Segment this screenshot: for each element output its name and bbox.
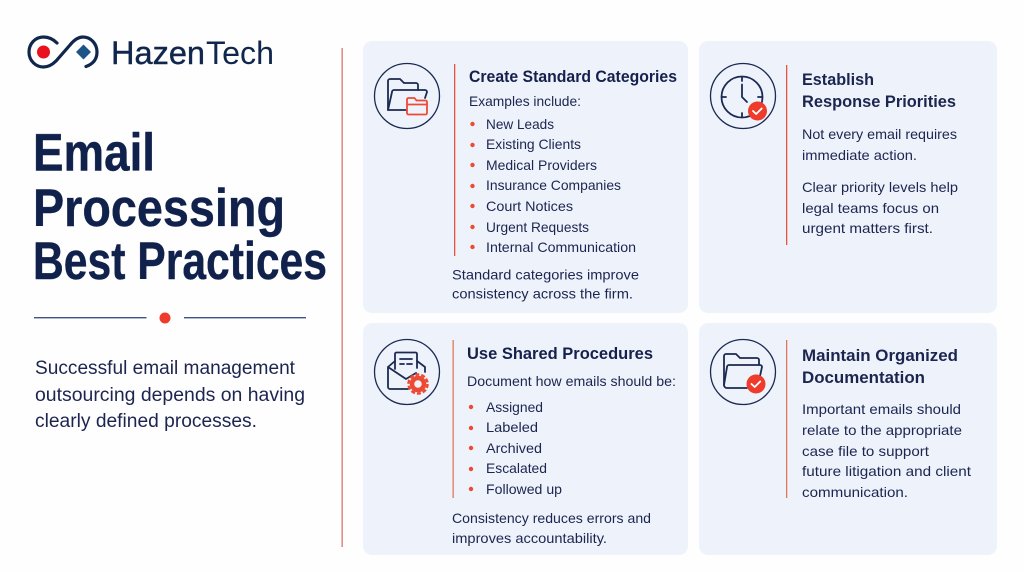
- intro text: outsourcing depends on having: [35, 385, 305, 406]
- body text: Important emails should: [802, 401, 961, 417]
- body text: relate to the appropriate: [802, 422, 962, 438]
- closing text: consistency across the firm.: [452, 286, 633, 302]
- bullet list: Existing Clients: [486, 136, 581, 152]
- closing text: Standard categories improve: [452, 266, 639, 282]
- icon: folder with check: [710, 340, 776, 404]
- heading: Establish: [802, 71, 874, 89]
- title: Email: [33, 124, 155, 182]
- body text: immediate action.: [802, 147, 917, 163]
- heading: Use Shared Procedures: [467, 345, 653, 363]
- heading: Documentation: [802, 369, 925, 387]
- logo wordmark: Tech: [206, 35, 274, 71]
- title divider: [34, 312, 306, 324]
- bullet list: New Leads: [486, 116, 554, 132]
- body text: case file to support: [802, 443, 929, 459]
- closing text: improves accountability.: [452, 530, 607, 546]
- body text: future litigation and client: [802, 463, 971, 479]
- body text: Not every email requires: [802, 126, 957, 142]
- bullet list: Court Notices: [486, 198, 573, 214]
- body text: communication.: [802, 484, 908, 500]
- body text: legal teams focus on: [802, 200, 939, 216]
- closing text: [452, 266, 639, 302]
- bullet list: Insurance Companies: [486, 177, 621, 193]
- body text: urgent matters first.: [802, 220, 933, 236]
- bullet list: Followed up: [486, 481, 562, 497]
- panel: create standard categories: [363, 41, 688, 313]
- logo wordmark: Hazen: [111, 35, 205, 71]
- panel: maintain organized documentation: [699, 323, 997, 555]
- bullet list: Medical Providers: [486, 157, 597, 173]
- heading: Maintain Organized: [802, 347, 958, 365]
- intro line: Examples include:: [469, 93, 581, 109]
- intro text: [35, 358, 305, 432]
- icon: folders: [374, 64, 440, 128]
- heading: Response Priorities: [802, 93, 956, 111]
- body text: [802, 126, 958, 236]
- title: [33, 124, 327, 291]
- icon: envelope with gear: [374, 340, 440, 404]
- icon: logo mark: [29, 37, 97, 67]
- title: Best Practices: [33, 232, 327, 291]
- panel: establish response priorities: [699, 41, 997, 313]
- logo wordmark: [111, 35, 274, 71]
- bullet list: [470, 116, 636, 255]
- heading: [802, 71, 956, 111]
- bullet list: [469, 399, 562, 497]
- intro line: Document how emails should be:: [467, 373, 676, 389]
- intro text: Successful email management: [35, 358, 296, 379]
- bullet list: Urgent Requests: [486, 219, 589, 235]
- bullet list: Assigned: [486, 399, 543, 415]
- heading: [802, 347, 958, 387]
- heading: Create Standard Categories: [469, 68, 677, 86]
- bullet list: Escalated: [486, 460, 547, 476]
- closing text: Consistency reduces errors and: [452, 510, 651, 526]
- title: Processing: [33, 179, 285, 238]
- body text: [802, 401, 971, 500]
- bullet list: Internal Communication: [486, 239, 636, 255]
- panel: use shared procedures: [363, 323, 688, 555]
- bullet list: Archived: [486, 440, 542, 456]
- intro text: clearly defined processes.: [35, 411, 257, 432]
- body text: Clear priority levels help: [802, 179, 958, 195]
- closing text: [452, 510, 651, 546]
- logo: [29, 35, 274, 71]
- icon: clock with check: [710, 64, 776, 128]
- bullet list: Labeled: [486, 419, 538, 435]
